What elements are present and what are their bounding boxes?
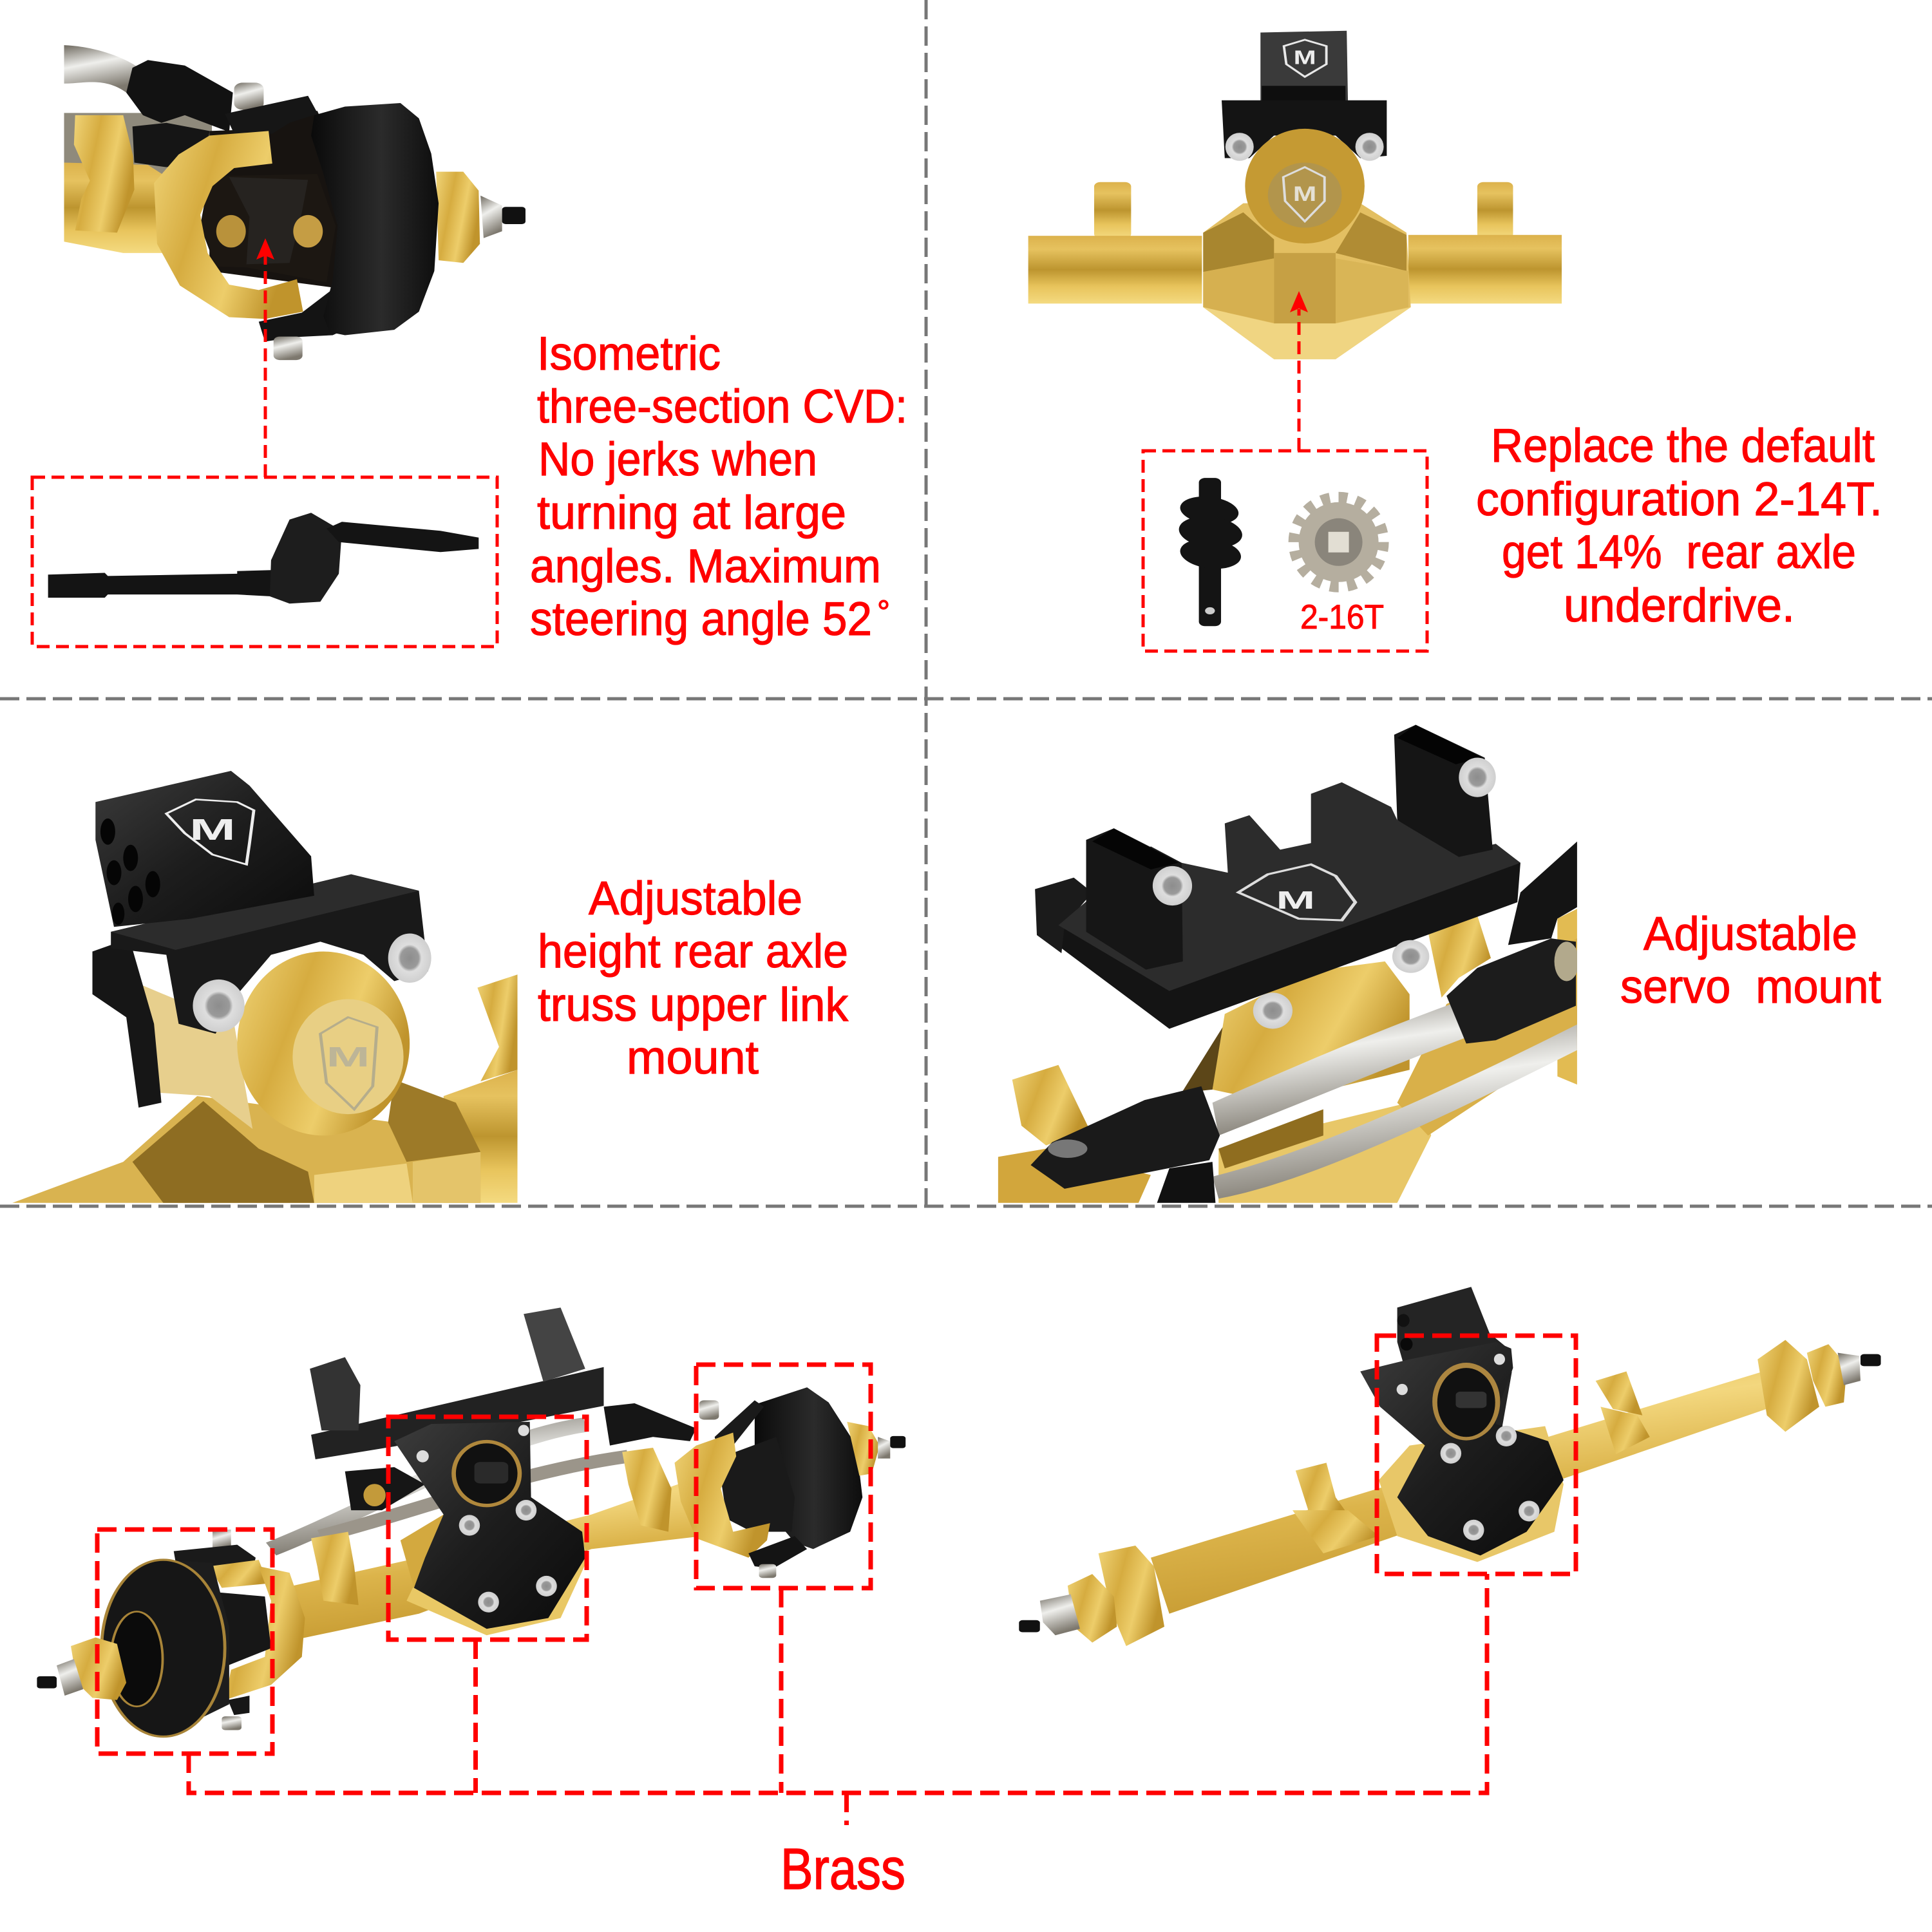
- text: gear replacement description: get 14% rear axle: [1502, 526, 1856, 578]
- panel: servo mount photo: [998, 725, 1579, 1203]
- panel: rear axle housing photo: [1028, 31, 1562, 359]
- text: servo mount description: servo mount: [1620, 961, 1881, 1013]
- icon: CVD shaft: [48, 513, 478, 603]
- panel: CVD steering knuckle photo: [64, 45, 526, 360]
- callout box: gears: [1143, 451, 1427, 651]
- panel divider lines: [0, 0, 1932, 1209]
- text: gear replacement description: configuration 2-14T.: [1476, 473, 1882, 526]
- arrow: shaft to knuckle: [256, 238, 274, 477]
- text: gear replacement description: [1476, 420, 1882, 632]
- logo: shield on plate: [1238, 864, 1356, 920]
- text: isometric CVD description: three-section CVD:: [537, 381, 907, 433]
- icon: black worm gear: [1175, 478, 1246, 626]
- panel: rear axle assembly photo: [1019, 1287, 1881, 1646]
- text: isometric CVD description: turning at large: [537, 487, 846, 539]
- callout box: CVD shaft part: [32, 477, 497, 647]
- label: Brass: Brass: [781, 1837, 905, 1902]
- logo: shield on cover: M: [327, 1041, 370, 1072]
- text: isometric CVD description: angles. Maximum: [530, 540, 881, 592]
- logo: shield on block: [166, 799, 254, 864]
- text: isometric CVD description: steering angle 52: [530, 593, 872, 645]
- text: gear replacement description: underdrive.: [1564, 580, 1795, 632]
- text: upper link mount description: truss upper link: [538, 979, 848, 1031]
- logo: shield on cover: M: [1293, 183, 1316, 206]
- text: upper link mount description: height rear axle: [538, 925, 848, 978]
- panel: upper link mount photo: [12, 771, 518, 1203]
- text: upper link mount description: mount: [627, 1032, 759, 1084]
- logo: shield on cover: [1283, 167, 1325, 222]
- text: servo mount description: [1620, 908, 1881, 1013]
- logo: shield on bracket: M: [1294, 46, 1316, 68]
- text: isometric CVD description: [530, 328, 907, 645]
- label: 2-16T: 2-16T: [1300, 598, 1384, 636]
- text: upper link mount description: Adjustable: [589, 873, 802, 925]
- text: isometric CVD description: Isometric: [537, 328, 721, 380]
- logo: shield on cover: [320, 1018, 377, 1109]
- text: servo mount description: Adjustable: [1643, 908, 1857, 960]
- text: gear replacement description: Replace the default: [1491, 420, 1875, 472]
- text: upper link mount description: [538, 873, 848, 1084]
- icon: silver 16-tooth gear: [1296, 500, 1381, 585]
- logo: shield on plate: M: [1276, 887, 1315, 914]
- text: isometric CVD description: °: [877, 594, 890, 630]
- logo: shield on bracket: [1284, 40, 1327, 77]
- logo: shield on block: M: [189, 813, 236, 846]
- arrow: gears to housing: [1290, 291, 1308, 451]
- brass callout: highlight boxes and connectors: [97, 1336, 1576, 1825]
- panel: front axle assembly photo: [37, 1307, 905, 1737]
- text: isometric CVD description: No jerks when: [538, 433, 817, 486]
